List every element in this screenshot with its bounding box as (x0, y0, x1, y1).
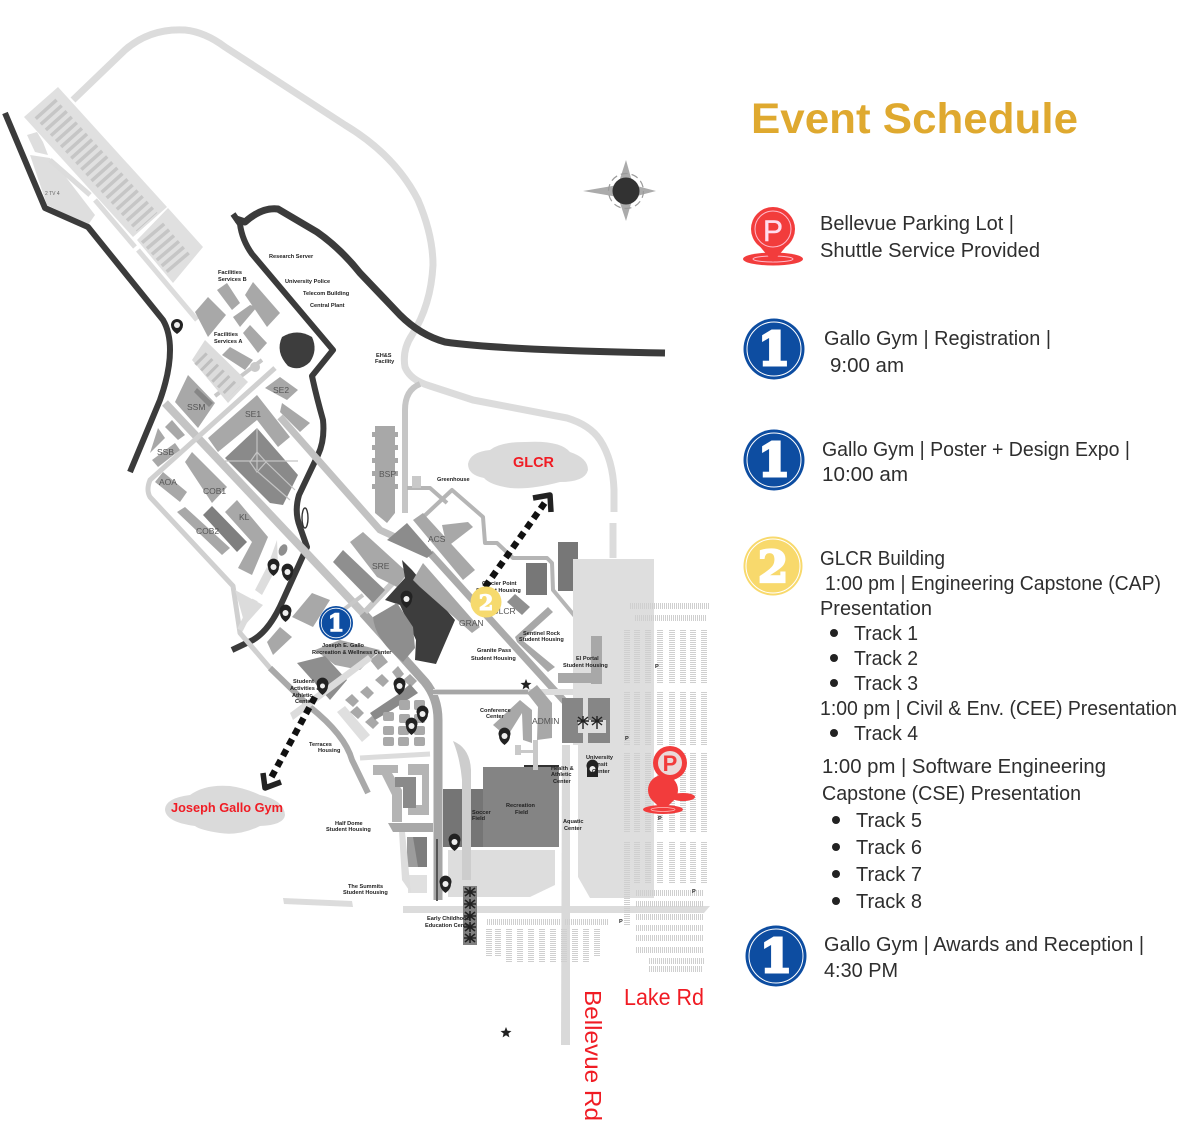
text: GLCR sessions (820, 548, 1177, 913)
map labels: Health & (551, 766, 574, 772)
text: registration (824, 328, 1051, 377)
text: GLCR sessions: GLCR Building (820, 548, 945, 570)
central plant (280, 332, 315, 368)
map labels: Joseph E. Gallo (322, 643, 365, 649)
icon: map badge 1 (319, 606, 353, 640)
central perimeter road (232, 214, 333, 650)
map labels: P (692, 889, 696, 895)
text: parking: Bellevue Parking Lot | (820, 213, 1014, 235)
map labels: Activities & (290, 686, 320, 692)
text: GLCR sessions: 1:00 pm | Engineering Capstone (CAP) (825, 573, 1161, 595)
icon: parking pin: P (763, 215, 783, 248)
text: GLCR sessions: Track 5 (856, 810, 922, 832)
text: expo: Gallo Gym | Poster + Design Expo | (822, 439, 1130, 461)
map labels: Greenhouse (437, 477, 470, 483)
text: awards (824, 934, 1144, 982)
icon: badge 1 expo (744, 430, 804, 490)
text: GLCR sessions: Track 6 (856, 837, 922, 859)
map labels: COB2 (196, 526, 219, 536)
map labels: P (619, 919, 623, 925)
map labels: Half Dome (335, 821, 363, 827)
text: GLCR sessions: Track 2 (854, 648, 918, 670)
callout: GLCR cloud (468, 442, 588, 488)
map labels: KL (239, 512, 250, 522)
map labels: P (625, 736, 629, 742)
map labels: Early Childhood (427, 916, 470, 922)
map labels: Student Housing (343, 890, 388, 896)
map labels: Aquatic (563, 819, 584, 825)
map labels: SE2 (273, 385, 289, 395)
compass (583, 160, 656, 221)
top parking lots: 2 TV 4 (45, 191, 60, 197)
map labels: P (655, 664, 659, 670)
map labels: Student Housing (476, 588, 521, 594)
map labels: Student Housing (519, 637, 564, 643)
buildings north-west (150, 282, 310, 625)
palm trees (463, 716, 603, 945)
map labels: Soccer (472, 810, 491, 816)
administration buildings (493, 636, 610, 743)
buildings south-west (283, 764, 438, 907)
map labels: Center (564, 826, 583, 832)
map labels: Facilities (218, 270, 242, 276)
text: awards: 4:30 PM (824, 960, 898, 982)
text: GLCR sessions: Track 1 (854, 623, 918, 645)
arrow: to Joseph Gallo Gym (263, 697, 315, 788)
map labels: Student Housing (563, 663, 608, 669)
icon: map parking pin (643, 746, 695, 814)
map labels: Services A (214, 339, 242, 345)
map labels: Student Housing (326, 827, 371, 833)
text: registration: 9:00 am (830, 355, 904, 377)
map labels: Central Plant (310, 303, 345, 309)
icon: badge 1 awards (746, 926, 806, 986)
map labels: COB1 (203, 486, 226, 496)
map markers (171, 319, 598, 1037)
arrow: to GLCR (485, 495, 551, 587)
icon: badge 2 GLCR (744, 536, 802, 596)
map labels: Sentinel Rock (523, 631, 561, 637)
map labels: Housing (318, 748, 341, 754)
map labels: Field (472, 816, 486, 822)
loop road (73, 30, 614, 558)
map labels: Education Center (425, 923, 472, 929)
north perimeter road (236, 209, 665, 353)
text: GLCR sessions: 1:00 pm | Software Engineering (822, 756, 1106, 778)
text: GLCR sessions: Presentation (820, 598, 932, 620)
buildings central (267, 426, 578, 758)
title: Event Schedule (751, 95, 1078, 143)
map labels: Recreation (506, 803, 535, 809)
map labels: El Portal (576, 656, 599, 662)
map labels: Granite Pass (477, 648, 511, 654)
left perimeter road (5, 113, 170, 472)
map labels: Center (295, 699, 314, 705)
map labels: ACS (428, 534, 446, 544)
map labels: Student Housing (471, 656, 516, 662)
map labels: Conference (480, 708, 511, 714)
icon: badge 1 awards: 1 (760, 929, 792, 983)
icon: badge 1 registration: 1 (758, 322, 790, 376)
text: expo (822, 439, 1130, 486)
icon: map parking pin: P (663, 751, 677, 776)
map labels: BSP (379, 469, 396, 479)
text: GLCR sessions: Capstone (CSE) Presentation (822, 783, 1081, 805)
map labels: P (658, 816, 662, 822)
map labels: SSM (187, 402, 205, 412)
top parking lots (24, 87, 203, 320)
text: GLCR sessions: Track 8 (856, 891, 922, 913)
callout: GLCR cloud: GLCR (513, 454, 554, 471)
label: Bellevue Rd: Bellevue Rd (580, 990, 606, 1121)
map labels: Services B (218, 277, 247, 283)
map labels: Athletic (292, 693, 313, 699)
map labels: GLCR (492, 606, 516, 616)
icon: parking pin (743, 207, 803, 266)
text: expo: 10:00 am (822, 464, 908, 486)
icon: badge 1 registration (744, 318, 804, 380)
map labels: Facility (375, 359, 395, 365)
map labels: Student (293, 679, 314, 685)
map labels: AOA (159, 477, 177, 487)
thin campus roads (405, 384, 420, 513)
map labels: Center (553, 779, 572, 785)
map labels: University Police (285, 279, 330, 285)
text: GLCR sessions: 1:00 pm | Civil & Env. (CEE) Presentation (820, 698, 1177, 720)
map labels: Facilities (214, 332, 238, 338)
main diagonal road (165, 403, 363, 613)
text: GLCR sessions: Track 7 (856, 864, 922, 886)
recreation field complex (443, 740, 559, 897)
second diagonal road (280, 417, 430, 553)
map labels: Research Server (269, 254, 314, 260)
text: GLCR sessions: Track 4 (854, 723, 918, 745)
map labels: SSB (157, 447, 174, 457)
text: awards: Gallo Gym | Awards and Reception | (824, 934, 1144, 956)
map labels: Center (486, 714, 505, 720)
campus map (5, 30, 710, 1045)
map labels: SE1 (245, 409, 261, 419)
map labels: EH&S (376, 353, 392, 359)
text: parking: Shuttle Service Provided (820, 240, 1040, 262)
icon: map badge 2: 2 (479, 590, 493, 615)
map labels: GRAN (459, 618, 484, 628)
parking area (403, 559, 710, 1045)
callout: Joseph Gallo Gym cloud (165, 786, 285, 834)
map labels: Transit (589, 762, 607, 768)
icon: badge 1 expo: 1 (758, 433, 790, 487)
map labels: Center (592, 769, 611, 775)
map labels: SRE (372, 561, 390, 571)
callout: Joseph Gallo Gym cloud: Joseph Gallo Gym (171, 800, 283, 815)
map labels: Field (515, 810, 529, 816)
map labels (157, 254, 696, 929)
map labels: Glacier Point (482, 581, 517, 587)
map labels: Athletic (551, 772, 572, 778)
map labels: Recreation & Wellness Center (312, 650, 392, 656)
icon: map badge 2 (470, 586, 502, 618)
map labels: Telecom Building (303, 291, 350, 297)
text: GLCR sessions: Track 3 (854, 673, 918, 695)
cross road (148, 368, 275, 668)
label: Lake Rd: Lake Rd (624, 984, 704, 1010)
icon: map badge 1: 1 (328, 610, 344, 637)
map labels: Terraces (309, 742, 332, 748)
map labels: University (586, 755, 614, 761)
text: registration: Gallo Gym | Registration | (824, 328, 1051, 350)
map labels: ADMIN (532, 716, 559, 726)
text: parking (820, 213, 1040, 262)
map labels: The Summits (348, 884, 383, 890)
icon: badge 2 GLCR: 2 (758, 542, 788, 593)
